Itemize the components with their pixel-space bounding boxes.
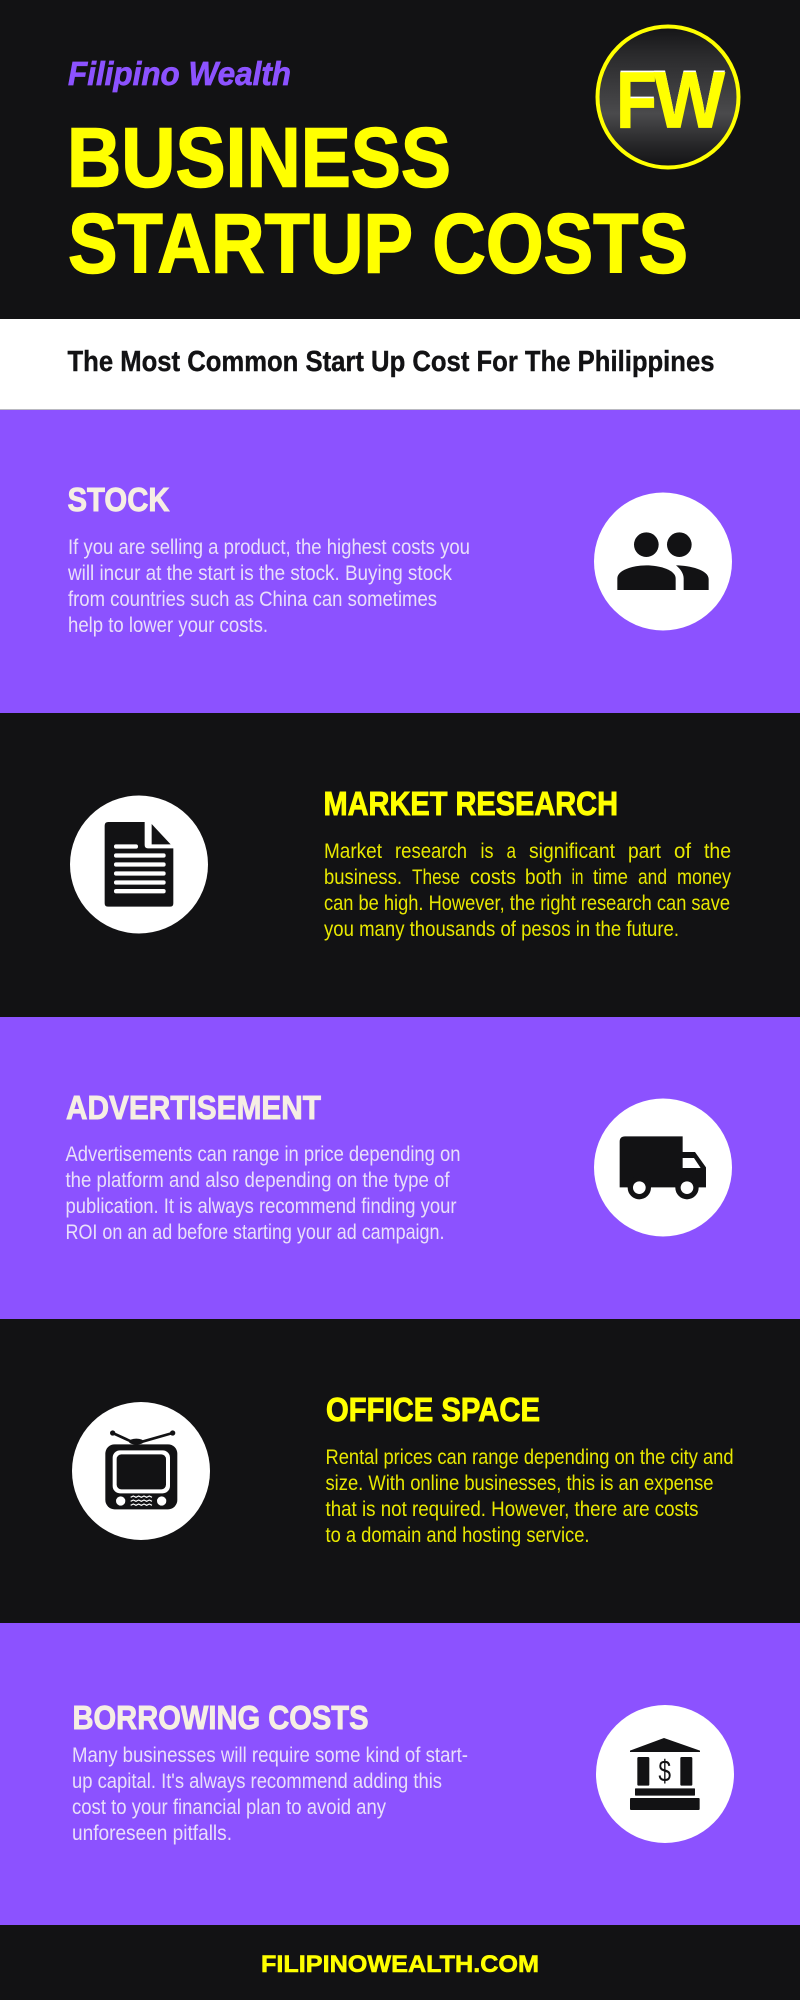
text block: stock: help to lower your costs. [68,614,268,637]
text block: office space [326,1446,734,1547]
icon: television [72,1402,210,1540]
title: STARTUP COSTS [68,196,688,290]
heading: office space: OFFICE SPACE [326,1391,540,1428]
text block: borrowing costs: up capital. It's always recommend adding this [72,1770,442,1793]
text block: market research: and [638,866,667,889]
text block: office space: that is not required. However, there are costs [326,1498,698,1521]
panel: footer [0,1925,800,2000]
icon: FW logo: F [616,54,657,142]
text block: market research: a [506,840,516,863]
text block: market research: research [395,840,467,863]
text block: borrowing costs: unforeseen pitfalls. [72,1822,232,1845]
heading: borrowing costs: BORROWING COSTS [72,1699,368,1736]
text block: advertisement: Advertisements can range in price depending on [66,1143,460,1166]
text block: market research: These [412,866,460,889]
panel: header [0,0,800,319]
text block: office space: Rental prices can range depending on the city and [326,1446,734,1469]
panel: borrowing costs [0,1623,800,1925]
text block: market research: time [593,866,628,889]
text block: borrowing costs: cost to your financial plan to avoid any [72,1796,386,1819]
icon: bank [596,1705,734,1843]
text block: market research: Market [324,840,382,863]
text block: market research: part [628,840,661,863]
text block: borrowing costs [72,1744,468,1845]
panel: market research [0,713,800,1017]
panel: stock [0,410,800,713]
heading: advertisement: ADVERTISEMENT [66,1089,321,1126]
title [67,110,688,290]
text block: market research: significant [529,840,615,863]
subtitle: The Most Common Start Up Cost For The Philippines [68,346,714,378]
icon: truck [594,1098,732,1236]
text block: stock: from countries such as China can sometimes [68,588,437,611]
icon: FW logo [598,26,738,168]
text block: market research: can be high. However, the right research can save [324,892,730,915]
text block: office space: to a domain and hosting service. [326,1524,590,1547]
text block: stock: will incur at the start is the stock. Buying stock [67,562,452,585]
text block: market research: the [704,840,731,863]
heading: market research: MARKET RESEARCH [324,785,618,822]
text block: market research: money [677,866,731,889]
text block: market research: is [480,840,494,863]
icon: people [594,492,732,630]
panel: office space [0,1319,800,1623]
panel: advertisement [0,1017,800,1319]
title: BUSINESS [67,110,451,204]
text block: advertisement [66,1143,460,1244]
heading: stock: STOCK [68,481,170,518]
text block: market research [324,840,731,941]
text block: advertisement: ROI on an ad before starting your ad campaign. [66,1221,444,1244]
text block: office space: size. With online businesses, this is an expense [326,1472,714,1495]
text block: market research: you many thousands of pesos in the future. [324,918,679,941]
brand name: Filipino Wealth [68,55,291,92]
text block: market research: costs [470,866,516,889]
icon: bank: $ [658,1754,671,1788]
text block: advertisement: publication. It is always recommend finding your [66,1195,456,1218]
text block: stock: If you are selling a product, the highest costs you [68,536,470,559]
text block: borrowing costs: Many businesses will require some kind of start- [72,1744,468,1767]
icon: FW logo: W [654,56,725,144]
text block: stock [67,536,470,637]
icon: FW logo: W [654,54,725,142]
footer url: FILIPINOWEALTH.COM [261,1951,539,1978]
icon: document [70,796,208,934]
text block: advertisement: the platform and also depending on the type of [66,1169,450,1192]
text block: market research: in [572,866,584,889]
panel: subtitle band [0,319,800,410]
text block: market research: business. [324,866,402,889]
icon: FW logo: F [616,56,657,144]
text block: market research: of [674,840,691,863]
text block: market research: both [525,866,562,889]
